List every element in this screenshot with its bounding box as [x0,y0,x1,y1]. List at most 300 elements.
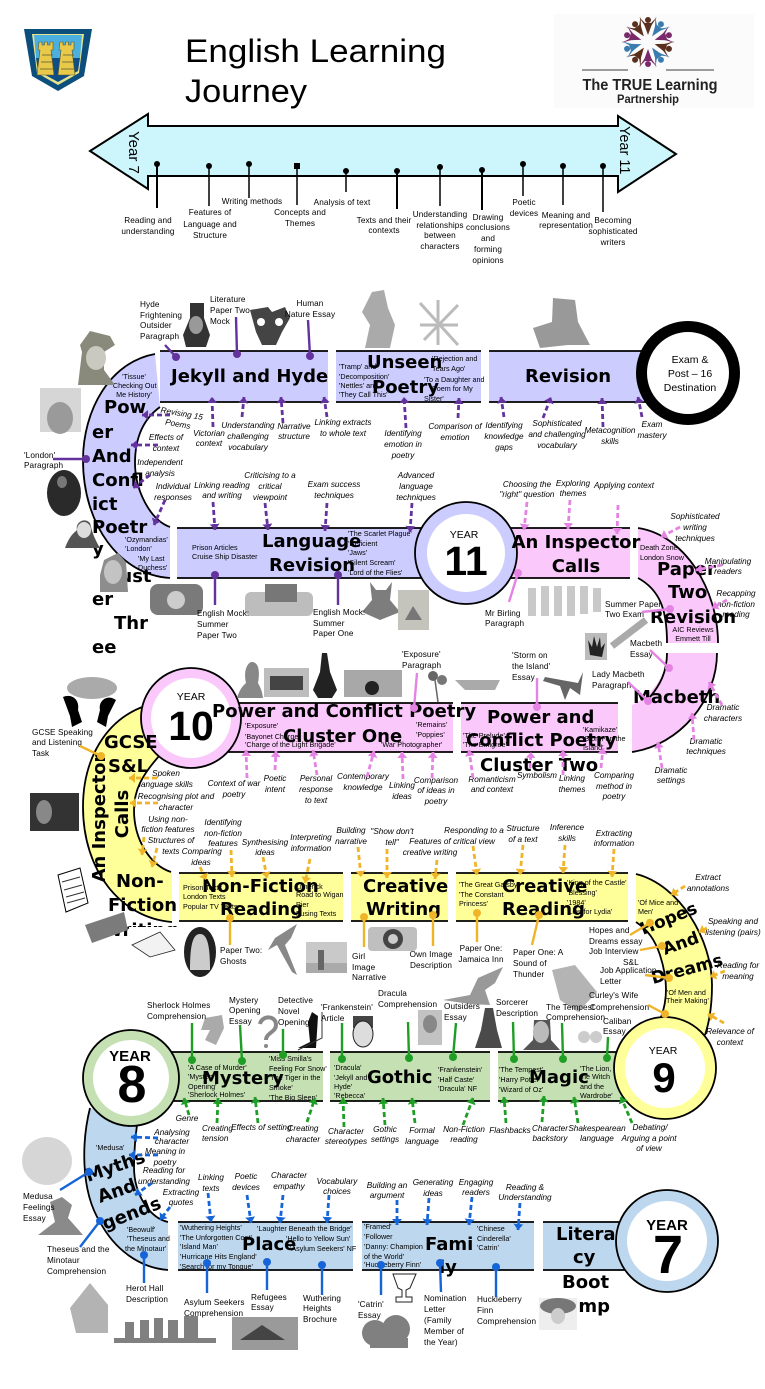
texts: Cluster Two left: 'The Prelude' [463,731,506,740]
label: Storm on the Island essay: Essay [512,673,536,682]
link: Ghosts [229,918,231,945]
texts: Creative Reading right: 'Blessing' [567,888,598,897]
texts: Magic left: 'Wizard of Oz' [499,1085,544,1094]
arrow: Exam success [325,503,327,531]
label: Huckleberry Finn Comprehension: Huckleberry [477,1295,523,1304]
label: Linking extracts: to whole text [320,429,367,438]
label: Dramatic characters: Dramatic [707,703,739,712]
label: Exposure paragraph: Paragraph [402,661,441,670]
heading: Creative Writing: Writing [366,899,441,920]
link: Jamaica Inn [476,913,478,942]
label: Individual responses: responses [154,493,192,502]
label: Detective Novel Opening: Opening [278,1018,310,1027]
arrow: Building narrative [358,847,361,877]
logo: The TRUE Learning Partnership: The TRUE Learning [582,77,718,94]
pin: meaning and representation [539,163,593,230]
pin: concepts and themes: Concepts and [274,208,326,217]
heading: Paper Two Revision: Two [668,582,707,603]
label: Contemporary knowledge: Contemporary [337,772,390,781]
label: Effects of context: context [153,444,180,453]
label: Macbeth essay: Macbeth [630,639,662,648]
label: Criticising viewpoint: Criticising to a [244,471,296,480]
label: Hyde paragraph: Frightening [140,311,182,320]
picture: word mosaic [85,912,128,943]
texts: Non-Fiction left: Prison Texts [183,883,222,892]
label: Wuthering Heights Brochure: Heights [303,1304,331,1313]
pin: drawing conclusions [466,167,510,265]
arrow: Building an argument [396,1200,398,1225]
picture: wigged man [65,520,100,548]
heading: Calls vertical: Calls [112,790,133,838]
arrow: Sophisticated writing [661,527,680,537]
label: Narrative structure: Narrative [277,422,311,431]
texts: Cluster One left: 'Exposure' [245,721,279,730]
panel: Language Revision bar [177,528,437,578]
link: Hyde paragraph [165,345,176,357]
picture: Wilfred Owen [237,662,263,698]
pin: understanding relationships: between [424,231,456,240]
label: Mr Birling paragraph: Paragraph [485,619,524,628]
link: Mr Birling [509,573,518,602]
label: Shakespearean language: language [580,1134,614,1143]
heading: Non-Fiction Writing: Writing [103,920,178,941]
arrow: Interpreting [305,859,310,883]
label: Own Image Description: Description [410,961,452,970]
heading: Power and Conflict Poetry Cluster Two: Cluster Two [480,755,598,776]
pin: concepts and themes: Themes [285,219,315,228]
pin: poetic devices: Poetic [512,198,536,207]
logo: The TRUE Learning Partnership [554,14,754,108]
arrow: Criticising [265,503,268,530]
label: GCSE Speaking and Listening Task: Task [32,749,50,758]
picture: old man in hat [78,331,115,385]
label: Gothic settings: Gothic [373,1125,397,1134]
texts: Ozymandias: 'Ozymandias' [125,535,168,544]
picture: soldiers [264,668,309,697]
label: Reading & Understanding: Reading & [506,1183,545,1192]
heading: Power and Conflict Poetry Cluster Three: Thr [114,613,148,634]
label: Inference skills: Inference [550,823,585,832]
arrow: Sophisticated vocabulary [543,397,551,418]
label: Genre: Genre [176,1114,199,1123]
label: Comparison of emotion: emotion [440,433,470,442]
panel: Power and Conflict Cluster Two bar [461,703,618,752]
badge: exam and post-16 destination: Destination [664,382,716,394]
link: Dracula [408,1022,409,1058]
badge: exam and post-16 destination: Exam & [672,354,708,366]
label: Criticising viewpoint: viewpoint [253,493,288,502]
label: Sophisticated vocabulary: and challenging [528,430,586,439]
picture: Frankenstein monster [353,1016,373,1047]
label: Non-Fiction reading: Non-Fiction [443,1125,485,1134]
label: Huckleberry Finn Comprehension: Finn [477,1306,494,1315]
arrow: Metacognition [602,398,603,427]
heading: Creative Reading: Creative [502,876,587,897]
arrow: Character backstory [542,1096,544,1122]
picture: crowd photo [40,388,81,434]
label: Comparison of ideas: poetry [424,797,448,806]
label: Nomination Letter: (Family [424,1316,452,1325]
label: Nomination Letter: Nomination [424,1294,467,1303]
texts: Creative Reading left: 'The Great Gatsby' [459,880,519,889]
arrow: Spoken language [129,777,157,779]
timeline arrow: Year 7 to Year 11 [90,114,676,192]
badge: year 9: 9 [652,1054,676,1101]
label: Creating character: character [286,1135,320,1144]
label: Effects of context: Effects of [149,433,184,442]
texts: Gothic left: 'Jekyll and [334,1073,367,1082]
label: Applying context: Applying context [593,481,655,490]
texts: Mystery right: Smoke' [269,1083,293,1092]
texts: Cluster One right: 'Remains' [416,720,448,729]
picture: Maleficent [362,582,400,620]
label: Synthesising ideas: ideas [255,848,275,857]
label: Victorian context: Victorian [193,429,225,438]
badge: year 7: 7 [653,1225,683,1285]
link: London [53,458,86,460]
label: Sophisticated vocabulary: Sophisticated [532,419,582,428]
picture: quill and paper [129,927,178,958]
arrow: Recognising plot [130,802,158,804]
label: Recognising plot and character: Recognising plot and [138,792,215,801]
label: Sophisticated writing: techniques [675,534,715,543]
link: Asylum Seekers [206,1263,208,1293]
link: Curley's Wife [648,1005,665,1014]
title: English Learning [185,33,446,69]
texts: Mystery left: 'Sherlock Holmes' [188,1090,246,1099]
arrow: Comparison of emotion [458,398,459,418]
texts: Creative Reading right: '1984' [567,898,586,907]
label: Identifying non-fiction features: non-fiction [204,829,242,838]
texts: Of Mice and Men: 'Of Mice and [638,898,678,907]
label: Responding to a critical view: Responding to a [444,826,504,835]
label: Romanticism and context: Romanticism [468,775,516,784]
heading: Power and Conflict Poetry Cluster Three: Confl [92,470,144,491]
label: Wuthering Heights Brochure: Wuthering [303,1294,341,1303]
arrow: Reading for meaning [710,971,725,977]
panel: year 10 crescent [83,706,172,922]
label: Generating ideas: Generating [413,1178,454,1187]
texts: Tramp: 'Tramp' and [339,362,376,371]
heading: Power and Conflict Poetry Cluster One: Power and Conflict Poetry [212,701,476,722]
label: Criticising viewpoint: critical [258,482,282,491]
label: Creating tension: tension [202,1134,229,1143]
texts: Family left: 'Follower [364,1232,393,1241]
label: Hyde paragraph: Outsider [140,321,172,330]
label: Understanding challenging vocabulary: Understanding [221,421,275,430]
timeline arrow: Year 7 to Year 11: Year 7 [125,131,142,174]
link: Sherlock [191,1023,193,1060]
label: Frankenstein Article: 'Frankenstein' [321,1003,373,1012]
texts: Ozymandias: 'My Last [138,554,165,563]
heading: Power and Conflict Poetry Cluster One: Cluster One [283,726,402,747]
picture: poppies [428,671,447,702]
label: Analysing character: character [155,1137,189,1146]
picture: spitfire [543,672,583,700]
label: Character empathy: empathy [273,1182,306,1191]
arrow: Comparing ideas [200,867,206,880]
label: Engaging readers: Engaging [459,1178,494,1187]
label: Exposure paragraph: 'Exposure' [402,650,441,659]
texts: Mystery right: 'The Tiger in the [269,1073,320,1082]
picture: dark scene photo [30,793,79,831]
arrow: Creating tension [217,1098,218,1123]
texts: Checking Out Me History: Me History' [116,390,152,399]
picture: exam girl [533,298,590,348]
arrow: Poetic intent [275,751,276,770]
arrow: Analysing [131,1137,158,1138]
unit headings [83,352,736,1317]
label: Exam success techniques: techniques [314,491,354,500]
pin: concepts and themes [274,163,326,228]
pin: reading and understanding: Reading and [124,216,172,225]
heading: Non-Fiction Writing: Non- [116,871,164,892]
label: Outsiders Essay: Essay [444,1013,468,1022]
pin: writing methods [222,161,282,206]
arrow: Linking texts [208,1193,211,1222]
picture: bloody hand print [585,633,607,660]
label: Detective Novel Opening: Novel [278,1007,300,1016]
heading: Family: ly [439,1257,457,1278]
label: Gothic settings: settings [371,1135,399,1144]
label: Nomination Letter: the Year) [424,1338,458,1347]
label: Storm on the Island essay: 'Storm on [512,651,548,660]
label: Literature Paper Two Mock: Paper Two [210,306,250,315]
label: Hyde paragraph: Hyde [140,300,160,309]
texts: Magic right: 'The Lion, [580,1064,611,1073]
arrow: Structures of texts [152,848,157,867]
label: Analysing character: Analysing [153,1128,190,1137]
heading: Creative Reading: Reading [502,899,585,920]
label: Features of creative writing: creative writing [403,848,458,857]
label: English Mock Paper One: Paper One [313,629,354,638]
arrow: Speaking and listening [699,928,707,932]
arrow: Inference [563,845,565,873]
texts: Mystery left: 'Mystery [188,1072,215,1081]
picture: Sherlock silhouette [201,1015,224,1045]
label: Character stereotypes: stereotypes [325,1137,367,1146]
picture: trophy [393,1274,416,1302]
label: Paper One Jamaica Inn: Paper One: [460,944,502,953]
heading: Non-Fiction Writing: Fiction [108,895,177,916]
pin: features of language and structure [183,163,237,240]
heading: Power and Conflict Poetry Cluster Three: ict [92,494,118,515]
panel: Revision bar [489,351,649,402]
texts: Family left: 'Danny: Champion [364,1242,423,1251]
label: Sophisticated writing: Sophisticated [670,512,720,521]
label: Job Interview: Job Interview [589,947,639,956]
arrow: Individual responses [154,500,165,525]
texts: Language Revision fiction: 'Jaws' [348,548,368,557]
label: Features of creative writing: Features of [409,837,451,846]
arrow: Exploring themes [568,500,570,529]
label: Paper One A Sound of Thunder: Sound of [513,959,547,968]
texts: Gothic left: 'Dracula' [334,1063,362,1072]
label: Choosing the right question: "right" question [500,490,555,499]
pin: drawing conclusions: and [481,234,495,243]
link: Exposure [414,673,417,708]
picture: creature hand [552,965,597,1012]
label: Herot Hall Description: Herot Hall [126,1284,163,1293]
texts: Language Revision fiction: 'Silent Scream' [348,558,396,567]
picture: hall [70,1283,108,1333]
label: Paper Two Ghosts: Paper Two: [220,946,262,955]
link: Herot Hall [143,1255,145,1283]
picture: two head silhouettes [362,1315,410,1348]
label: Outsiders Essay: Outsiders [444,1002,480,1011]
label: Girl Image Narrative: Girl [352,952,365,961]
arrow: Extracting quotes [160,1207,170,1220]
link: GCSE speaking [80,746,101,756]
label: Hyde paragraph: Paragraph [140,332,179,341]
label: Literature Paper Two Mock: Literature [210,295,246,304]
label: Recapping non-fiction reading: Recapping [716,589,756,598]
label: Dramatic settings: settings [657,776,685,785]
texts: Mystery right: 'Miss Smilla's [269,1054,312,1063]
heading: Literacy Boot Camp: Boot [562,1272,609,1293]
picture: two silhouettes [63,696,116,727]
label: GCSE Speaking and Listening Task: GCSE Speaking [32,728,93,737]
arrow: Applying context [617,505,618,534]
pin: becoming sophisticated writers: Becoming [594,216,632,225]
label: Sophisticated vocabulary: vocabulary [537,441,578,450]
arrow: Character stereotypes [343,1098,344,1127]
texts: Mystery right: Feeling For Snow' [269,1064,327,1073]
heading: Power and Conflict Poetry Cluster Three: ee [92,637,116,658]
arrow: Non-Fiction reading [463,1098,473,1125]
label: Personal response: to text [305,796,328,805]
panel: Creative Writing bar [351,873,448,921]
label: Linking reading and writing: Linking reading [194,481,250,490]
label: Using non-fiction features: fiction features [141,825,195,834]
label: Symbolism: Symbolism [517,771,557,780]
badge: year 7 [616,1190,718,1292]
label: Recapping non-fiction reading: reading [722,610,750,619]
label: Advanced language techniques: language [399,482,433,491]
label: Identifying non-fiction features: features [208,839,238,848]
pin: drawing conclusions: conclusions [466,223,510,232]
texts: Magic right: Wardrobe' [580,1091,613,1100]
heading: Macbeth: Macbeth [633,687,720,708]
picture: camera [368,927,417,951]
label: Mystery Opening Essay: Mystery [229,996,259,1005]
link: Storm on the Island [536,678,538,707]
texts: Language Revision articles: Prison Articles [192,543,238,552]
label: Personal response: Personal [300,774,332,783]
label: Metacognition skills: Metacognition [585,426,636,435]
label: Catrin Essay: Essay [358,1311,382,1320]
link: Lady Macbeth [628,682,648,701]
label: Character backstory: Character [532,1124,568,1133]
texts: Ozymandias: 'London' [125,544,152,553]
arrow: Formal language [412,1098,415,1123]
picture: shark [268,924,297,975]
label: Human Nature Essay: Nature Essay [285,310,336,319]
texts: Creative Reading left: 'The Constant [459,890,504,899]
picture: detective silhouette [298,1012,322,1050]
arrow: Reading for understanding [135,1183,152,1195]
picture: ruined house [232,1317,298,1350]
label: Extract annotations: annotations [687,884,729,893]
panel: Macbeth curve [632,653,717,752]
arrow: Genre [184,1098,189,1115]
arrow: Linking themes [562,750,564,775]
heading: Non-Fiction Reading: Reading [220,899,303,920]
label: Sorcerer Description: Description [496,1009,538,1018]
texts: Death Zone: Death Zone [640,543,678,552]
label: Victorian context: context [196,439,223,448]
label: Literature Paper Two Mock: Mock [210,317,231,326]
label: Detective Novel Opening: Detective [278,996,313,1005]
picture: skull inkblot [250,307,290,345]
label: Choosing the right question: Choosing the [503,480,552,489]
label: Comparing method: method in [596,782,632,791]
label: Extracting information: information [594,839,635,848]
texts: Rejection and Years Ago: Tears Ago' [432,364,466,373]
picture: Medusa scribble [22,1137,72,1185]
arrow: Poetic devices [247,1195,251,1223]
label: Curley's Wife Comprehension: Comprehension [590,1003,649,1012]
panel: Non-Fiction Reading bar [179,873,343,921]
texts: Magic left: 'The Tempest' [499,1065,544,1074]
label: Asylum Seekers Comprehension: Comprehension [184,1309,243,1318]
heading: Power and Conflict Poetry Cluster Three: Poetr [92,517,147,538]
heading: And (Myths and Legends): And [95,1175,139,1208]
label: Dramatic techniques: Dramatic [690,737,722,746]
badge: year 11: 11 [444,538,488,584]
texts: Non-Fiction left: London Texts [183,892,226,901]
texts: Language Revision fiction: 'Deficient [348,539,377,548]
label: Huckleberry Finn Comprehension: Comprehension [477,1317,536,1326]
picture: Minotaur [38,1197,83,1235]
arrow: Romanticism [469,750,473,778]
link: Mock [236,317,237,354]
icon: school shield crest [24,29,92,91]
label: Hopes and Dreams essay: Dreams essay [589,937,643,946]
picture: butterflies [578,1031,602,1043]
label: Identifying knowledge gaps: Identifying [485,421,523,430]
label: Reading for understanding: Reading for [143,1166,185,1175]
label: Contemporary knowledge: knowledge [343,783,383,792]
label: Debating: Debating/ [632,1123,668,1132]
label: Theseus and the Minotaur: Theseus and the [47,1245,110,1254]
label: Medusa Feelings Essay: Essay [23,1214,47,1223]
label: Creating tension: Creating [202,1124,233,1133]
panel: Jekyll and Hyde bar [160,351,328,402]
arrow: Advanced language [410,503,412,532]
picture: walking silhouettes [114,1316,216,1343]
arrow: Comparing method [601,748,603,768]
arrow: Generating ideas [427,1198,429,1225]
label: Extract annotations: Extract [695,873,721,882]
texts: Gothic right: 'Half Caste' [438,1075,475,1084]
label: Spoken language skills: language skills [139,780,193,789]
arrow: Contemporary knowledge [367,751,374,777]
pin: reading and understanding: understanding [121,227,175,236]
texts: Creative Reading right: 'Lies for Lydia' [567,907,613,916]
picture: author portrait [418,1010,442,1045]
picture: newspapers [58,868,88,912]
panel: Family bar [362,1222,534,1270]
picture: ghost [184,927,216,977]
panel: Gothic bar [330,1052,490,1101]
texts: Family right: 'Catrin' [477,1243,500,1252]
texts: Cluster Two left: 'The Emigree' [463,740,508,749]
label: Identifying knowledge gaps: gaps [495,443,513,452]
texts: Non-Fiction left: Popular TV Texts [183,902,238,911]
label: Interpreting information: information [291,844,332,853]
label: Linking texts: texts [202,1184,220,1193]
